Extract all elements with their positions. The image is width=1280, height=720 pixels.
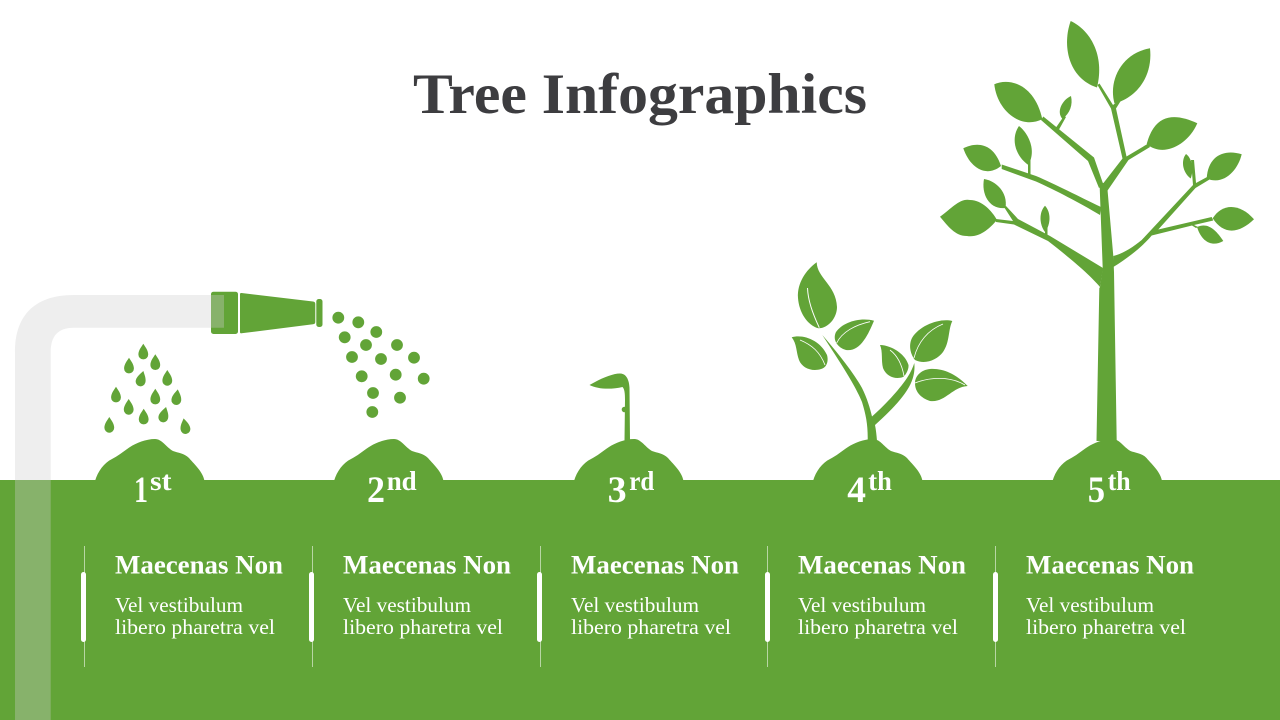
leaves [940, 200, 997, 236]
ordinal 2nd: nd [387, 466, 417, 496]
text block: step 4 [765, 546, 967, 667]
ordinal 5th: th [1108, 466, 1131, 496]
text block: step 5: Vel vestibulum [1026, 593, 1154, 617]
icon: young plant [792, 262, 968, 441]
text block: step 1: Maecenas Non [115, 550, 284, 580]
text block: step 3: Maecenas Non [571, 550, 740, 580]
ordinal 1st: 1 [134, 470, 148, 511]
text block: step 2: libero pharetra vel [343, 615, 503, 639]
ordinal 2nd: 2 [367, 470, 385, 511]
text block: step 1 [81, 546, 284, 667]
soil mounds [95, 439, 1162, 481]
ordinal 5th: 5 [1088, 470, 1105, 511]
title: Tree Infographics [413, 63, 867, 126]
ordinal 4th: 4 [847, 470, 866, 511]
text block: step 2 [309, 546, 512, 667]
icon: hose nozzle [211, 292, 322, 334]
text block: step 4: libero pharetra vel [798, 615, 958, 639]
text block: step 2: Vel vestibulum [343, 593, 471, 617]
text block: step 4: Vel vestibulum [798, 593, 926, 617]
text block: step 3: libero pharetra vel [571, 615, 731, 639]
text block: step 5: Maecenas Non [1026, 550, 1195, 580]
ordinal 1st: st [150, 466, 172, 496]
icon: water drops [104, 344, 191, 435]
branches [996, 206, 1103, 287]
icon: grown tree [940, 21, 1254, 441]
text block: step 5: libero pharetra vel [1026, 615, 1186, 639]
ordinal 3rd [608, 466, 654, 511]
ordinal 3rd: 3 [608, 470, 627, 511]
ordinal 3rd: rd [629, 466, 654, 496]
text block: step 1: libero pharetra vel [115, 615, 275, 639]
icon: water spray dots [332, 312, 430, 418]
text block: step 3 [537, 546, 740, 667]
ordinal 2nd [367, 466, 417, 511]
trunk [1096, 182, 1117, 441]
text block: step 5 [993, 546, 1195, 667]
ordinal 1st [134, 466, 172, 511]
icon: sprout [590, 374, 630, 441]
ordinal 5th [1088, 466, 1131, 511]
ordinal 4th [847, 466, 892, 511]
ground band [0, 480, 1280, 720]
text block: step 2: Maecenas Non [343, 550, 512, 580]
ordinal 4th: th [868, 466, 892, 496]
text block: step 1: Vel vestibulum [115, 593, 243, 617]
icon: garden hose [15, 295, 224, 720]
text block: step 4: Maecenas Non [798, 550, 967, 580]
text block: step 3: Vel vestibulum [571, 593, 699, 617]
